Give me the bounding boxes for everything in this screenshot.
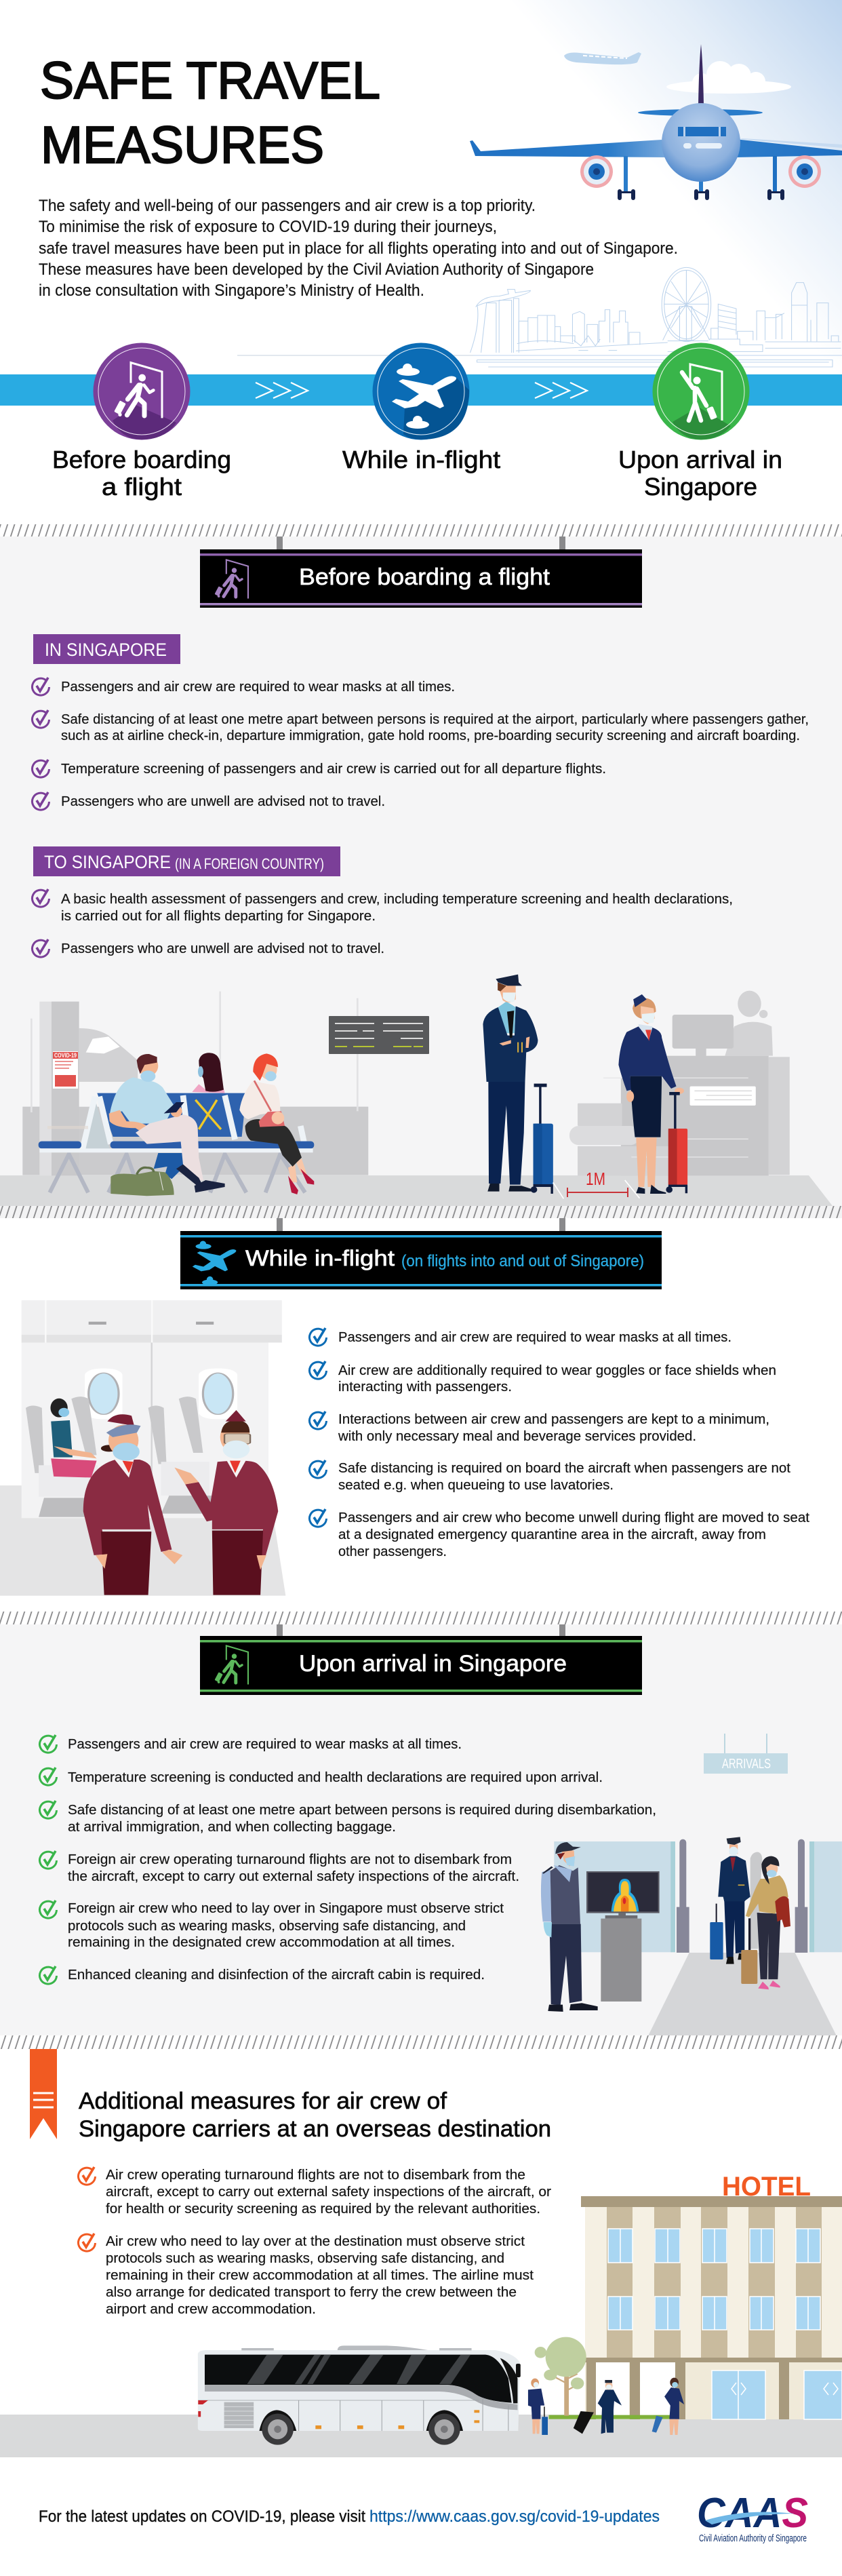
checklist: upon arrival: Passengers and air crew are required to wear masks at all times. [68,1737,462,1752]
main title [40,52,380,174]
checklist: additional measures [79,2167,551,2317]
checklist: to Singapore: is carried out for all flights departing for Singapore. [61,909,376,924]
flight attendant with goggles [174,1410,278,1595]
attendant suitcase [666,1092,687,1193]
1 metre distance label: 1M [586,1169,605,1189]
crew member with blue case [528,2379,548,2435]
checklist: upon arrival: Foreign air crew operating turnaround flights are not to disembark from [68,1852,512,1867]
checklist: upon arrival: at arrival immigration, and when collecting baggage. [68,1820,396,1835]
header panel [0,44,842,501]
illustration: departure hall backdrop [22,992,368,1175]
stage label: before boarding: Before boarding [52,446,231,473]
illustration: seated passengers with spaced seating [39,1053,314,1196]
checklist: upon arrival: Safe distancing of at least one metre apart between persons is required during disembarkation, [68,1803,656,1818]
icon: upon arrival [652,343,750,440]
checklist: additional measures: airport and crew accommodation. [106,2302,316,2317]
checklist: additional measures: Air crew who need to lay over at the destination must observe strict [106,2234,525,2249]
icon: orange ribbon [30,2049,57,2139]
panel: before boarding [0,536,833,1206]
checklist: while in-flight: other passengers. [338,1544,447,1559]
checklist: to Singapore: A basic health assessment of passengers and crew, including temperature screening and health declarations, [61,892,733,907]
checklist: while in-flight: at a designated emergency quarantine area in the aircraft, away from [338,1527,766,1542]
sign: while in-flight [180,1218,662,1289]
1 metre distance label [567,1169,628,1197]
arrivals sign: ARRIVALS [722,1757,771,1772]
arrows between stages [256,383,587,398]
checklist: upon arrival: remaining in the designated crew accommodation at all times. [68,1935,455,1950]
crew member walking [652,2378,684,2435]
checklist: additional measures: remaining in their crew accommodation at all times. The airline must [106,2268,534,2283]
cloud [666,61,791,94]
sign: while in-flight: (on flights into and out of Singapore) [401,1252,644,1270]
arriving crew member [710,1837,762,1964]
sign: upon arrival [200,1624,642,1695]
intro paragraph [39,197,678,300]
checklist: upon arrival: protocols such as wearing masks, observing safe distancing, and [68,1919,466,1934]
heading: additional measures: Singapore carriers at an overseas destination [79,2116,551,2142]
sign: upon arrival: Upon arrival in Singapore [299,1651,567,1677]
checklist: in Singapore [33,678,809,810]
checklist: upon arrival: the aircraft, except to carry out external safety inspections of the aircraft. [68,1869,519,1884]
large airplane [470,44,842,200]
sign: while in-flight: While in-flight [245,1246,395,1270]
tree [535,2337,670,2419]
illustration: coach, tree and air crew [198,2337,684,2445]
checklist: while in-flight: Safe distancing is required on board the aircraft when passengers are not [338,1461,790,1476]
checklist: additional measures: for health or security screening as required by the relevant authorities. [106,2202,540,2217]
intro paragraph: safe travel measures have been put in place for all flights operating into and out of Singapore. [39,239,678,258]
checklist: additional measures: protocols such as wearing masks, observing safe distancing, and [106,2251,504,2266]
horizon line [237,355,473,356]
floor [0,1175,833,1206]
heading: to Singapore: (IN A FOREIGN COUNTRY) [175,855,324,872]
sign: before boarding: Before boarding a flight [299,564,550,590]
illustration: arrival hall thermal screening [541,1837,842,2035]
intro paragraph: To minimise the risk of exposure to COVID-19 during their journeys, [39,218,497,236]
pilot suitcase [531,1084,553,1194]
checklist: upon arrival: Enhanced cleaning and disinfection of the aircraft cabin is required. [68,1968,485,1983]
illustration: check-in counter with distancing crew [483,975,790,1198]
heading: to Singapore [33,846,340,876]
main title: MEASURES [41,116,324,174]
heading: to Singapore: TO SINGAPORE [44,852,171,872]
thermal screen [586,1871,660,2002]
checklist: upon arrival: Foreign air crew who need to lay over in Singapore must observe strict [68,1901,504,1916]
coach bus [198,2345,521,2445]
illustration: cabin crew in aircraft cabin [0,1300,285,1596]
security officer [541,1842,598,2012]
checklist: to Singapore [33,889,733,957]
checklist: while in-flight: seated e.g. when queueing to use lavatories. [338,1478,614,1493]
stage label: upon arrival: Singapore [644,473,757,501]
heading: in Singapore [33,634,180,664]
stage label: before boarding [52,446,231,501]
checklist: while in-flight: with only necessary meal and beverage services provided. [338,1429,696,1444]
man with phone [109,1054,225,1192]
CAAS logo: CAAS [697,2490,808,2537]
checklist: while in-flight: Passengers and air crew who become unwell during flight are moved to seat [338,1510,809,1525]
footer link text: For the latest updates on COVID-19, please visit [39,2507,365,2526]
distance markers [553,1180,639,1198]
footer link text: https://www.caas.gov.sg/covid-19-updates [369,2507,660,2526]
flight attendant with face shield [83,1414,182,1595]
road [0,2415,842,2457]
poster: covid-19 [53,1051,78,1089]
checklist: in Singapore: Passengers who are unwell are advised not to travel. [61,794,385,809]
icon: in flight [373,343,469,440]
checklist: in Singapore: Safe distancing of at least one metre apart between persons is required at the airport, particularly where passengers gather, [61,712,809,727]
woman behind [192,1053,225,1093]
skyline illustration [468,267,842,367]
arrivals sign [704,1734,788,1774]
stage label: before boarding: a flight [102,473,182,501]
stage label: while in flight: While in-flight [342,446,500,473]
stage label: upon arrival: Upon arrival in [618,446,782,473]
footer [39,2490,808,2544]
small distant plane [564,52,641,64]
hall background [554,1839,842,2035]
panel: while in-flight [0,1218,809,1596]
footer link text [39,2507,660,2526]
hotel building [581,2172,842,2419]
panel: upon arrival [40,1624,842,2035]
intro paragraph: The safety and well-being of our passengers and air crew is a top priority. [39,197,536,215]
main title: SAFE TRAVEL [40,52,380,110]
poster: covid-19: COVID-19 [54,1052,77,1059]
counter background [569,991,790,1175]
arriving passenger with hijab [741,1856,790,1989]
flight information board [329,1016,429,1054]
duffel bag [111,1167,174,1196]
checklist: upon arrival [40,1735,656,1984]
bench [39,1093,314,1192]
sign: before boarding [200,536,642,608]
checklist: in Singapore: such as at airline check-in, departure immigration, gate hold rooms, pre-boarding security screening and aircraft boarding. [61,728,800,743]
checklist: additional measures: also arrange for dedicated transport to ferry the crew between the [106,2285,517,2300]
checklist: additional measures: aircraft, except to carry out external safety inspections of the aircraft, or [106,2185,551,2200]
cabin interior [0,1300,285,1596]
intro paragraph: These measures have been developed by the Civil Aviation Authority of Singapore [39,260,594,279]
checklist: while in-flight [310,1328,809,1559]
checklist: while in-flight: Interactions between air crew and passengers are kept to a minimum, [338,1412,769,1427]
stage label: upon arrival [618,446,782,501]
checklist: upon arrival: Temperature screening is conducted and health declarations are required upon arrival. [68,1770,603,1785]
pilot [483,975,538,1192]
checklist: in Singapore: Passengers and air crew are required to wear masks at all times. [61,680,455,695]
flight attendant [618,994,684,1194]
pilot with black case [574,2380,622,2434]
checklist: additional measures: Air crew operating turnaround flights are not to disembark from the [106,2168,525,2183]
checklist: to Singapore: Passengers who are unwell are advised not to travel. [61,941,384,956]
hotel building: HOTEL [722,2172,811,2202]
icon: before boarding [94,343,190,440]
panel: additional measures [0,2049,842,2457]
journey ribbon [0,374,842,406]
checklist: while in-flight: interacting with passengers. [338,1380,512,1394]
X seat marker [195,1100,221,1129]
intro paragraph: in close consultation with Singapore’s Ministry of Health. [39,281,424,300]
checklist: while in-flight: Air crew are additionally required to wear goggles or face shields when [338,1363,776,1378]
checklist: while in-flight: Passengers and air crew are required to wear masks at all times. [338,1330,731,1345]
heading: in Singapore: IN SINGAPORE [45,640,167,660]
heading: additional measures [79,2088,551,2142]
woman with red hair [239,1053,314,1194]
checklist: in Singapore: Temperature screening of passengers and air crew is carried out for all departure flights. [61,762,606,777]
seated passenger [50,1399,97,1478]
heading: additional measures: Additional measures for air crew of [79,2088,447,2114]
